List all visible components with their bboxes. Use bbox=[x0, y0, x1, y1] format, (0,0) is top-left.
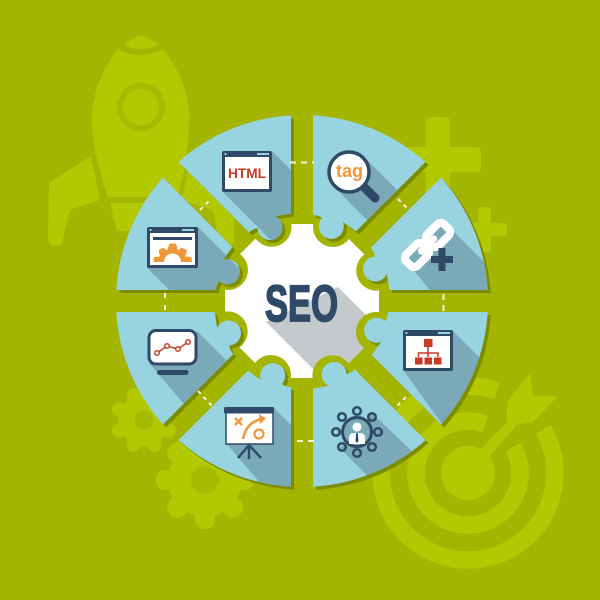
background icon: large plus bbox=[396, 117, 481, 201]
icon: chain link with plus bbox=[403, 221, 453, 271]
panel: settings bbox=[116, 178, 243, 293]
dashed connectors between panels bbox=[165, 162, 444, 441]
icon: HTML window: HTML bbox=[228, 165, 266, 181]
central gear: SEO bbox=[225, 224, 379, 378]
icon: presentation board bbox=[224, 407, 274, 459]
icon: person network bbox=[332, 407, 382, 457]
icon: monitor with line chart bbox=[149, 330, 196, 375]
panel: strategy bbox=[178, 363, 294, 490]
icon: settings window bbox=[147, 227, 198, 268]
icon: HTML window bbox=[222, 151, 272, 192]
background icon: small gear bbox=[100, 376, 188, 464]
background icon: target with arrow bbox=[381, 365, 568, 560]
panel: site structure bbox=[364, 312, 491, 428]
background icon: small plus bbox=[462, 207, 507, 252]
icon: magnifier with tag: tag bbox=[336, 161, 363, 181]
icon: sitemap window bbox=[403, 330, 453, 371]
background icon: large gear bbox=[156, 431, 254, 529]
panel: link building bbox=[362, 178, 491, 293]
panel: HTML bbox=[178, 115, 294, 243]
panel: tag search bbox=[313, 115, 428, 242]
panel: analytics bbox=[116, 312, 244, 428]
icon: magnifier with tag bbox=[329, 152, 375, 198]
panel: social network bbox=[313, 362, 428, 490]
central gear: SEO: SEO bbox=[265, 275, 338, 332]
background icon: rocket bbox=[48, 35, 234, 246]
